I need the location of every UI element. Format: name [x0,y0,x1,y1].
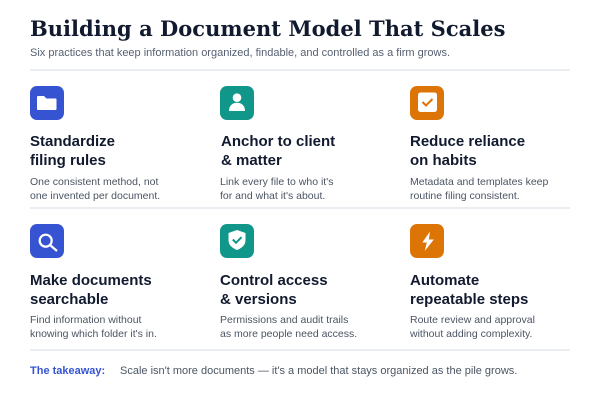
heading: filing rules [30,152,106,169]
description: for and what it's about. [220,190,325,202]
heading [410,272,528,308]
description: knowing which folder it's in. [30,328,157,340]
card: control access [220,224,357,340]
description: without adding complexity. [410,328,532,340]
takeaway label: The takeaway: [30,365,105,377]
description: Link every file to who it's [220,176,333,188]
heading [30,133,115,169]
heading [410,133,525,169]
description [30,176,160,202]
description: routine filing consistent. [410,190,520,202]
icon: checkbox [410,86,444,120]
description: Find information without [30,314,141,326]
heading: Make documents [30,272,152,289]
heading: Reduce reliance [410,133,525,150]
heading: & versions [220,291,297,308]
description [410,314,535,340]
heading: Automate [410,272,479,289]
heading [30,272,152,308]
card: anchor to client [220,86,335,202]
subtitle: Six practices that keep information organized, findable, and controlled as a firm grows. [30,47,450,59]
card: standardize filing rules [30,86,160,202]
heading: searchable [30,291,108,308]
heading [221,133,335,169]
heading: Control access [220,272,328,289]
description: one invented per document. [30,190,160,202]
description: as more people need access. [220,328,357,340]
description: Permissions and audit trails [220,314,348,326]
icon: person [220,86,254,120]
heading: Anchor to client [221,133,335,150]
card: automate [410,224,535,340]
icon: folder [30,86,64,120]
icon: magnifier [30,224,64,258]
description: One consistent method, not [30,176,158,188]
takeaway text: Scale isn't more documents — it's a model that stays organized as the pile grows. [120,365,517,377]
card: make searchable [30,224,157,340]
title: Building a Document Model That Scales [30,16,506,41]
description [410,176,548,202]
icon: shield [220,224,254,258]
description: Route review and approval [410,314,535,326]
heading [220,272,328,308]
heading: Standardize [30,133,115,150]
description: Metadata and templates keep [410,176,548,188]
description [30,314,157,340]
description [220,314,357,340]
description [220,176,334,202]
heading: repeatable steps [410,291,528,308]
card: reduce reliance [410,86,548,202]
heading: & matter [221,152,282,169]
icon: lightning bolt [410,224,444,258]
heading: on habits [410,152,477,169]
